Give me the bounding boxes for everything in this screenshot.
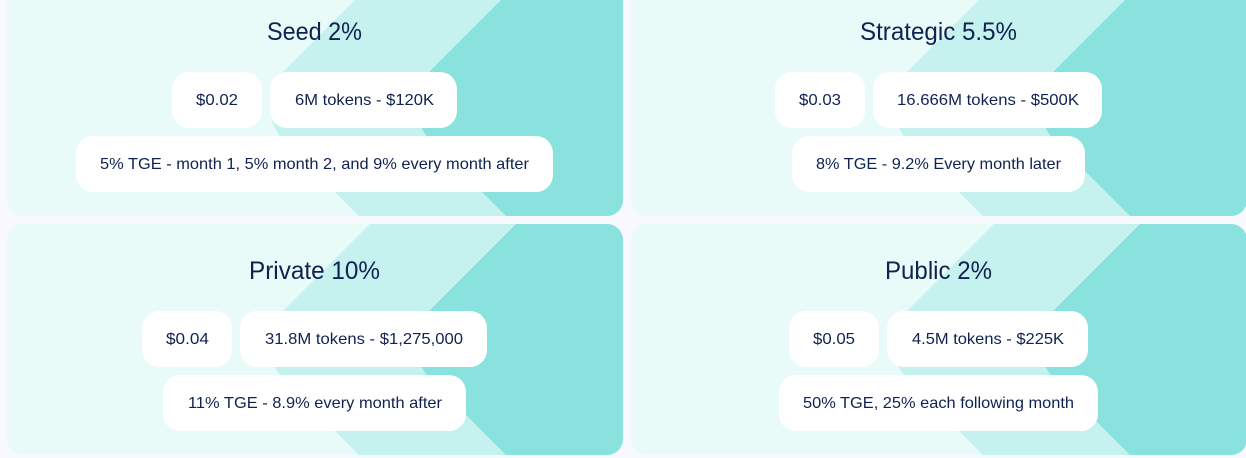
panel background: Seed	[7, 0, 623, 216]
price pill: $0.03	[775, 72, 865, 128]
tokens pill: 16.666M tokens: 16.666M tokens - $500K	[897, 92, 1079, 109]
vesting pill: Public	[779, 375, 1098, 431]
vesting pill: Strategic	[792, 136, 1085, 192]
heading: Public 2%: Public 2%	[885, 257, 992, 285]
tokens pill: 6M tokens	[270, 72, 457, 128]
panel: Strategic	[631, 0, 1246, 216]
vesting pill: Public: 50% TGE, 25% each following month	[803, 395, 1074, 412]
vesting pill: Seed: 5% TGE - month 1, 5% month 2, and 9% every month after	[100, 156, 530, 173]
heading: Strategic 5.5%: Strategic 5.5%	[860, 18, 1017, 46]
tokens pill: 31.8M tokens: 31.8M tokens - $1,275,000	[265, 331, 463, 348]
panel background: Strategic	[631, 0, 1246, 216]
panel: Public	[631, 224, 1246, 455]
price pill: $0.05: $0.05	[813, 331, 855, 348]
heading: Seed 2%: Seed 2%	[267, 18, 362, 46]
tokens pill: 16.666M tokens	[873, 72, 1102, 128]
tokens pill: 4.5M tokens: 4.5M tokens - $225K	[912, 331, 1064, 348]
panel background: Public	[631, 224, 1246, 455]
vesting pill: Private: 11% TGE - 8.9% every month after	[188, 395, 443, 412]
price pill: $0.04: $0.04	[166, 331, 209, 348]
vesting pill: Strategic: 8% TGE - 9.2% Every month later	[816, 156, 1062, 173]
price pill: $0.03: $0.03	[799, 92, 841, 109]
price pill: $0.02: $0.02	[196, 92, 238, 109]
price pill: $0.04	[142, 311, 232, 367]
panel: Seed	[7, 0, 623, 216]
heading: Private 10%: Private 10%	[249, 257, 380, 285]
tokens pill: 31.8M tokens	[240, 311, 487, 367]
price pill: $0.05	[789, 311, 879, 367]
price pill: $0.02	[172, 72, 262, 128]
panel background: Private	[7, 224, 623, 455]
vesting pill: Private	[163, 375, 466, 431]
panel: Private	[7, 224, 623, 455]
tokens pill: 6M tokens: 6M tokens - $120K	[295, 92, 434, 109]
vesting pill: Seed	[76, 136, 553, 192]
tokens pill: 4.5M tokens	[887, 311, 1088, 367]
